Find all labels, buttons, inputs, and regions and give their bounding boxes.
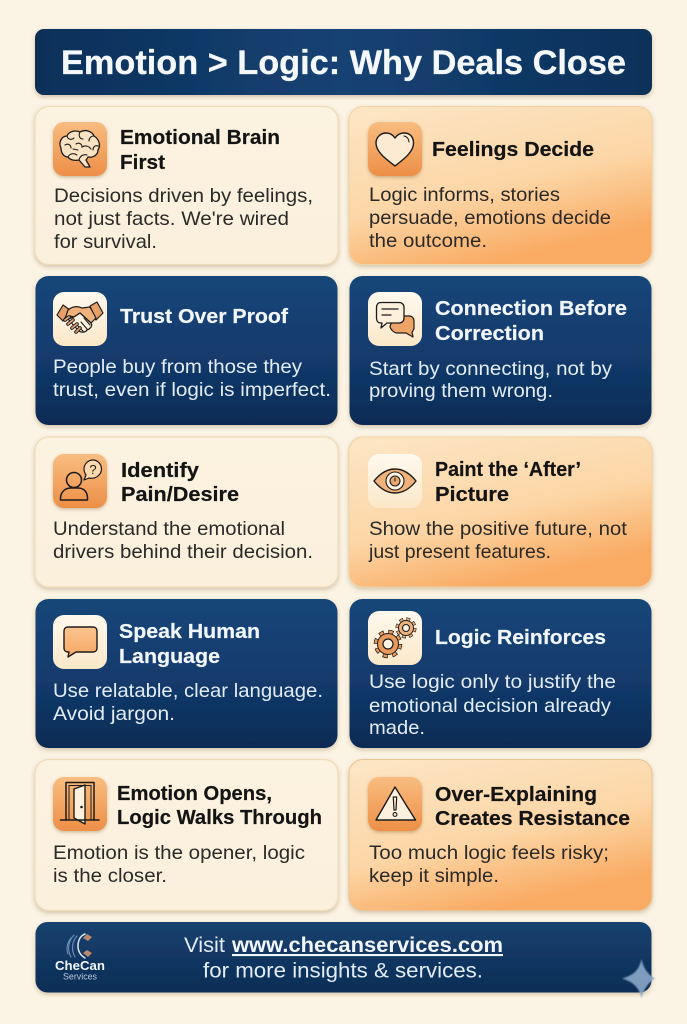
call to action [184,934,503,982]
heading [117,782,322,829]
body text: Start by connecting, not by [369,358,612,380]
heading [120,126,280,174]
panel: Over-Explaining Creates Resistance [349,760,652,910]
body text [369,184,611,252]
body text: the outcome. [369,230,487,252]
body text: just present features. [368,541,551,563]
logo: CheCan Services: CheCan [55,958,105,973]
body text [53,356,331,401]
body text [53,518,313,563]
body text: persuade, emotions decide [369,207,611,229]
heading: Identify [121,459,200,482]
icon: gears [368,611,422,665]
heading [119,620,260,668]
call to action: Visit [184,934,225,957]
heading: Picture [435,483,509,506]
call to action: www.checanservices.com [231,934,503,957]
heading: Over-Explaining [435,783,597,806]
panel: Emotional Brain First [35,106,338,264]
icon: brain [53,122,107,176]
heading: Feelings Decide [432,138,594,161]
body text: Avoid jargon. [53,703,175,725]
heading: Speak Human [119,620,260,643]
icon: speech bubble [53,615,107,669]
heading: Connection Before [435,297,627,320]
logo: CheCan Services: Services [63,972,97,982]
body text: drivers behind their decision. [53,541,313,563]
body text: Understand the emotional [53,518,285,540]
body text: Use logic only to justify the [369,671,616,693]
icon: heart [368,122,422,176]
panel: Logic Reinforces [350,599,652,748]
heading: Paint the ‘After’ [435,458,581,481]
title banner [35,29,652,95]
body text [54,185,313,253]
body text: not just facts. We're wired [54,208,289,230]
body text: People buy from those they [53,356,302,378]
heading [435,297,627,345]
logo: CheCan Services [55,934,105,982]
body text [53,680,323,725]
body text [369,842,609,887]
body text: Too much logic feels risky; [369,842,609,864]
footer banner [36,922,655,998]
heading: Trust Over Proof [120,305,288,328]
title banner: Emotion > Logic: Why Deals Close [61,44,626,82]
body text: Decisions driven by feelings, [54,185,313,207]
heading: Pain/Desire [121,483,239,506]
heading: Emotion Opens, [117,782,272,805]
panel: Paint the After Picture [349,437,652,587]
body text: Use relatable, clear language. [53,680,323,702]
icon: chat bubbles [368,292,422,346]
body text: proving them wrong. [369,380,553,402]
body text: keep it simple. [369,865,499,887]
heading [435,783,630,830]
heading: Creates Resistance [435,807,630,830]
panel: Connection Before Correction [350,276,652,425]
icon: handshake [53,292,107,346]
body text: for survival. [54,231,157,253]
icon: person with question: ? [89,462,97,477]
icon: eye [368,454,422,508]
panel: Speak Human Language [36,599,338,748]
body text [369,671,616,739]
icon: person with question [53,454,107,508]
body text: is the closer. [53,865,167,887]
heading [435,458,581,506]
heading: Emotional Brain [120,126,280,149]
panel: Feelings Decide [349,106,652,264]
body text [53,842,305,887]
body text: emotional decision already [369,695,611,717]
icon: sparkle [622,959,655,998]
call to action: for more insights & services. [203,960,483,982]
heading: Logic Walks Through [117,806,322,829]
icon: warning triangle [368,777,422,831]
body text: trust, even if logic is imperfect. [53,379,331,401]
body text: made. [369,717,425,739]
panel: Identify Pain/Desire [35,437,338,587]
heading [121,459,239,506]
heading: Logic Reinforces [435,626,606,649]
body text [369,358,612,402]
heading: First [120,151,165,174]
heading: Correction [435,322,544,345]
panel: Trust Over Proof [36,276,338,425]
body text: Emotion is the opener, logic [53,842,305,864]
panel: Emotion Opens, Logic Walks Through [35,760,338,910]
icon: door [53,777,107,831]
body text: Logic informs, stories [369,184,560,206]
heading: Language [119,645,220,668]
body text: Show the positive future, not [369,518,628,540]
body text [368,518,628,563]
